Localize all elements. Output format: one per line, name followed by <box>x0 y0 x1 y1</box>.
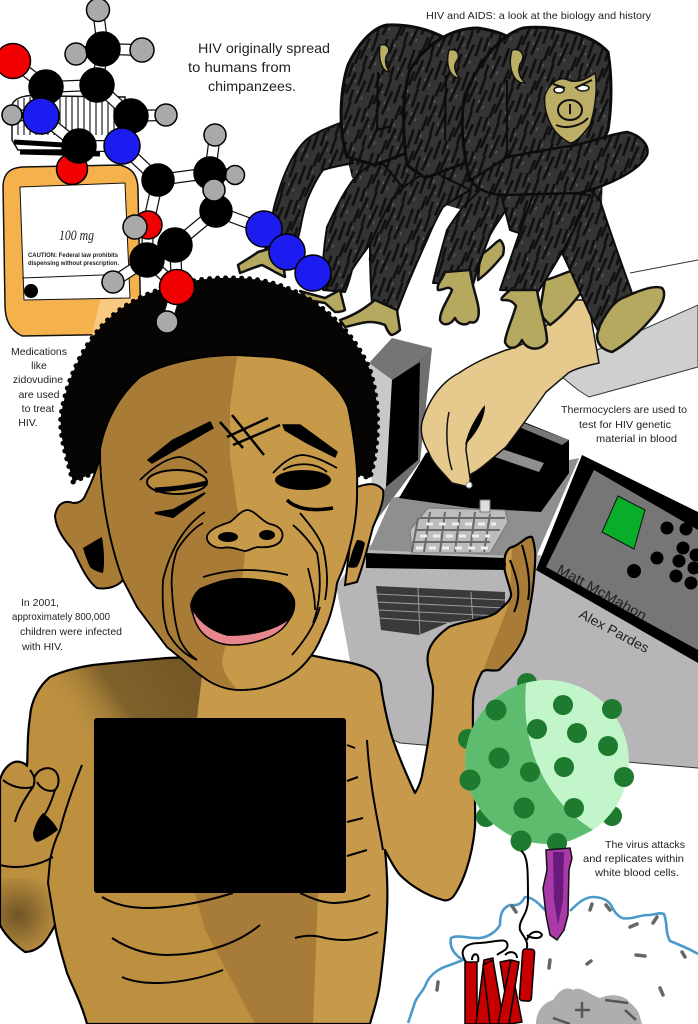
cell specks <box>437 904 685 995</box>
surface spikes <box>460 695 634 853</box>
caption: medications: HIV. <box>18 417 38 429</box>
pill bottle <box>3 95 141 336</box>
caption: chimpanzees: chimpanzees. <box>208 78 296 94</box>
chimpanzees <box>238 25 664 352</box>
caption: chimpanzees: to humans from <box>188 59 291 75</box>
caption: white blood cells: and replicates within <box>583 853 684 865</box>
right eye <box>273 455 337 510</box>
tongue <box>192 607 290 645</box>
brows <box>148 422 337 463</box>
virus sphere <box>465 680 629 844</box>
right ear <box>345 484 383 585</box>
spikes behind <box>458 673 622 827</box>
cell nucleus <box>536 988 642 1024</box>
bottle label <box>20 183 130 300</box>
bonds <box>12 10 264 322</box>
chimp limbs <box>265 123 632 335</box>
dose text: 100 mg <box>59 228 94 244</box>
vent grille <box>376 586 505 635</box>
author credits: Alex Pardes <box>577 606 652 656</box>
red DNA helix <box>465 949 535 1024</box>
gloved hand with arm <box>421 300 599 488</box>
caption: children infected: children were infected <box>20 626 122 638</box>
caption: medications: to treat <box>22 403 54 415</box>
chimp body mass <box>345 100 604 212</box>
HIV virus particle <box>458 673 634 852</box>
chimp ears <box>379 45 525 83</box>
caption: medications <box>11 346 67 429</box>
chimp face <box>545 73 596 143</box>
caption: medications: zidovudine <box>13 374 63 386</box>
author credits: Matt McMahon <box>555 562 649 623</box>
face <box>100 355 357 690</box>
viral RNA strand and receptor <box>463 848 572 1024</box>
caption: children infected: In 2001, <box>21 597 59 609</box>
caption: medications: like <box>31 360 47 372</box>
caption: children infected: approximately 800,000 <box>12 611 110 623</box>
caption: children infected: with HIV. <box>21 641 63 653</box>
caption: thermocyclers: material in blood <box>596 433 677 445</box>
caption: thermocyclers: Thermocyclers are used to <box>561 404 687 416</box>
caption: thermocyclers <box>561 404 687 445</box>
right hand fingers <box>510 545 529 612</box>
bottle cap <box>12 95 125 154</box>
cheek lines <box>163 512 327 660</box>
caption: chimpanzees <box>188 40 330 94</box>
child illustration <box>0 275 536 1024</box>
black strand <box>463 851 542 962</box>
chimp feet <box>238 248 664 352</box>
zidovudine molecule <box>0 0 331 333</box>
atoms <box>0 0 331 333</box>
lab coat sleeve <box>562 260 698 397</box>
thermocycler machine <box>336 338 698 768</box>
caption: medications: are used <box>19 389 60 401</box>
chimp feet behind <box>370 240 584 325</box>
cell membrane <box>408 897 698 1023</box>
hand shadow <box>33 813 58 842</box>
machine lid <box>366 338 432 540</box>
caption: chimpanzees: HIV originally spread <box>198 40 330 56</box>
caption: children infected <box>12 597 122 653</box>
ribs <box>102 740 383 983</box>
caption: white blood cells: white blood cells. <box>594 867 679 879</box>
caption: thermocyclers: test for HIV genetic <box>579 419 671 431</box>
sample droplet <box>466 482 472 488</box>
hair <box>61 278 378 482</box>
forehead marks <box>220 415 280 455</box>
control panel <box>536 455 698 663</box>
front chimp <box>462 27 648 195</box>
purple receptor <box>543 848 572 940</box>
caption: white blood cells: The virus attacks <box>605 839 685 851</box>
bottle label: dispensing without prescription. <box>28 261 119 267</box>
back chimp <box>341 25 445 165</box>
ear blotches <box>83 537 365 573</box>
author credits <box>555 562 652 656</box>
green display <box>602 496 645 549</box>
nose <box>207 510 282 551</box>
middle chimp <box>404 28 512 178</box>
sample tube rack <box>410 500 508 553</box>
body shading <box>1 538 534 1023</box>
bottle body <box>3 165 141 336</box>
left ear <box>55 458 123 589</box>
left eye <box>140 457 207 517</box>
body base <box>0 537 535 1024</box>
caution text: CAUTION: Federal law prohibits <box>28 253 119 259</box>
caption: white blood cells <box>583 839 685 879</box>
white blood cell <box>408 897 698 1024</box>
keypad buttons <box>627 522 698 590</box>
mouth <box>190 578 295 643</box>
front chimp arm <box>470 132 648 195</box>
machine body <box>336 545 698 768</box>
left hand and arm creases <box>0 765 82 925</box>
censor panel on chest <box>94 718 346 893</box>
tray and heating block <box>366 420 579 570</box>
body outline <box>0 537 535 1024</box>
page title: HIV and AIDS: a look at the biology and history <box>426 10 652 22</box>
caption: medications: Medications <box>11 346 67 358</box>
